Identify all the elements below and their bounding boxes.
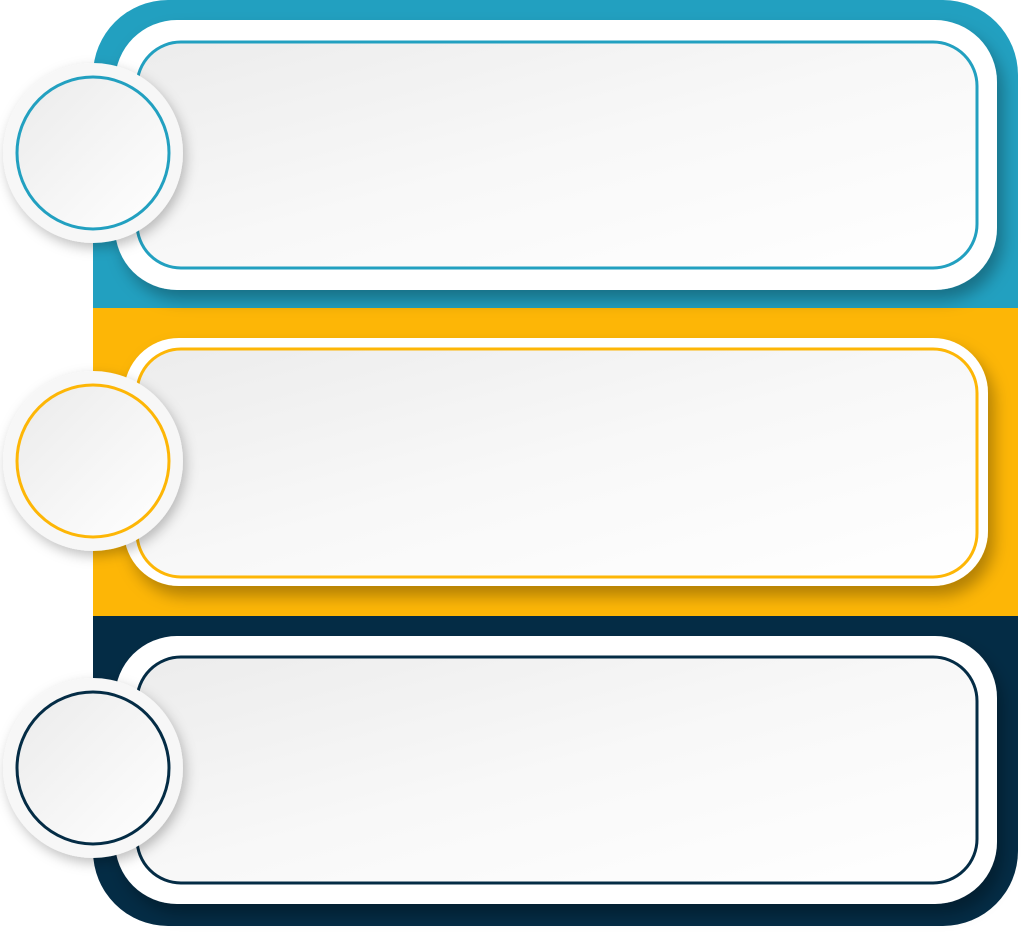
panel: card 3 — [115, 636, 997, 904]
panel: card 2 — [124, 338, 988, 586]
icon: circle 3 — [3, 678, 183, 858]
icon: circle 1 — [3, 63, 183, 243]
panel: card 1 — [115, 20, 997, 290]
icon: circle 2 — [3, 371, 183, 551]
